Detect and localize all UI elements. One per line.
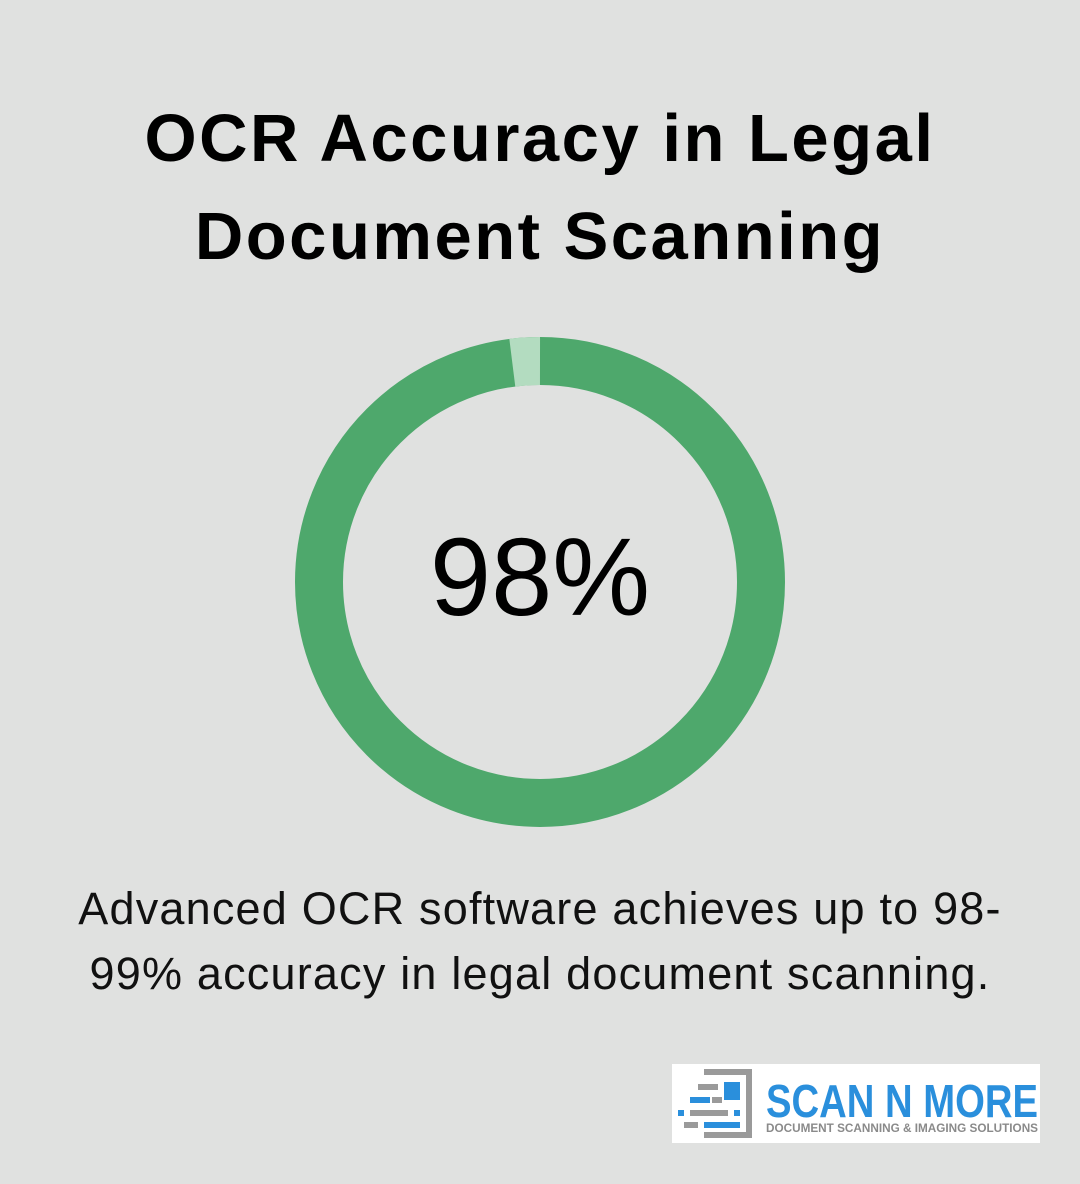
tagline: DOCUMENT SCANNING & IMAGING SOLUTIONS bbox=[766, 1121, 1038, 1135]
description: Advanced OCR software achieves up to 98- bbox=[78, 883, 1002, 934]
title bbox=[144, 101, 935, 274]
title: OCR Accuracy in Legal bbox=[144, 101, 935, 176]
percentage: 98% bbox=[430, 516, 650, 639]
description: 99% accuracy in legal document scanning. bbox=[89, 948, 990, 999]
logo bbox=[672, 1064, 1040, 1143]
title: Document Scanning bbox=[195, 199, 885, 274]
remaining segment bbox=[512, 361, 540, 363]
icon: scanner bbox=[678, 1069, 752, 1138]
description bbox=[78, 883, 1002, 999]
